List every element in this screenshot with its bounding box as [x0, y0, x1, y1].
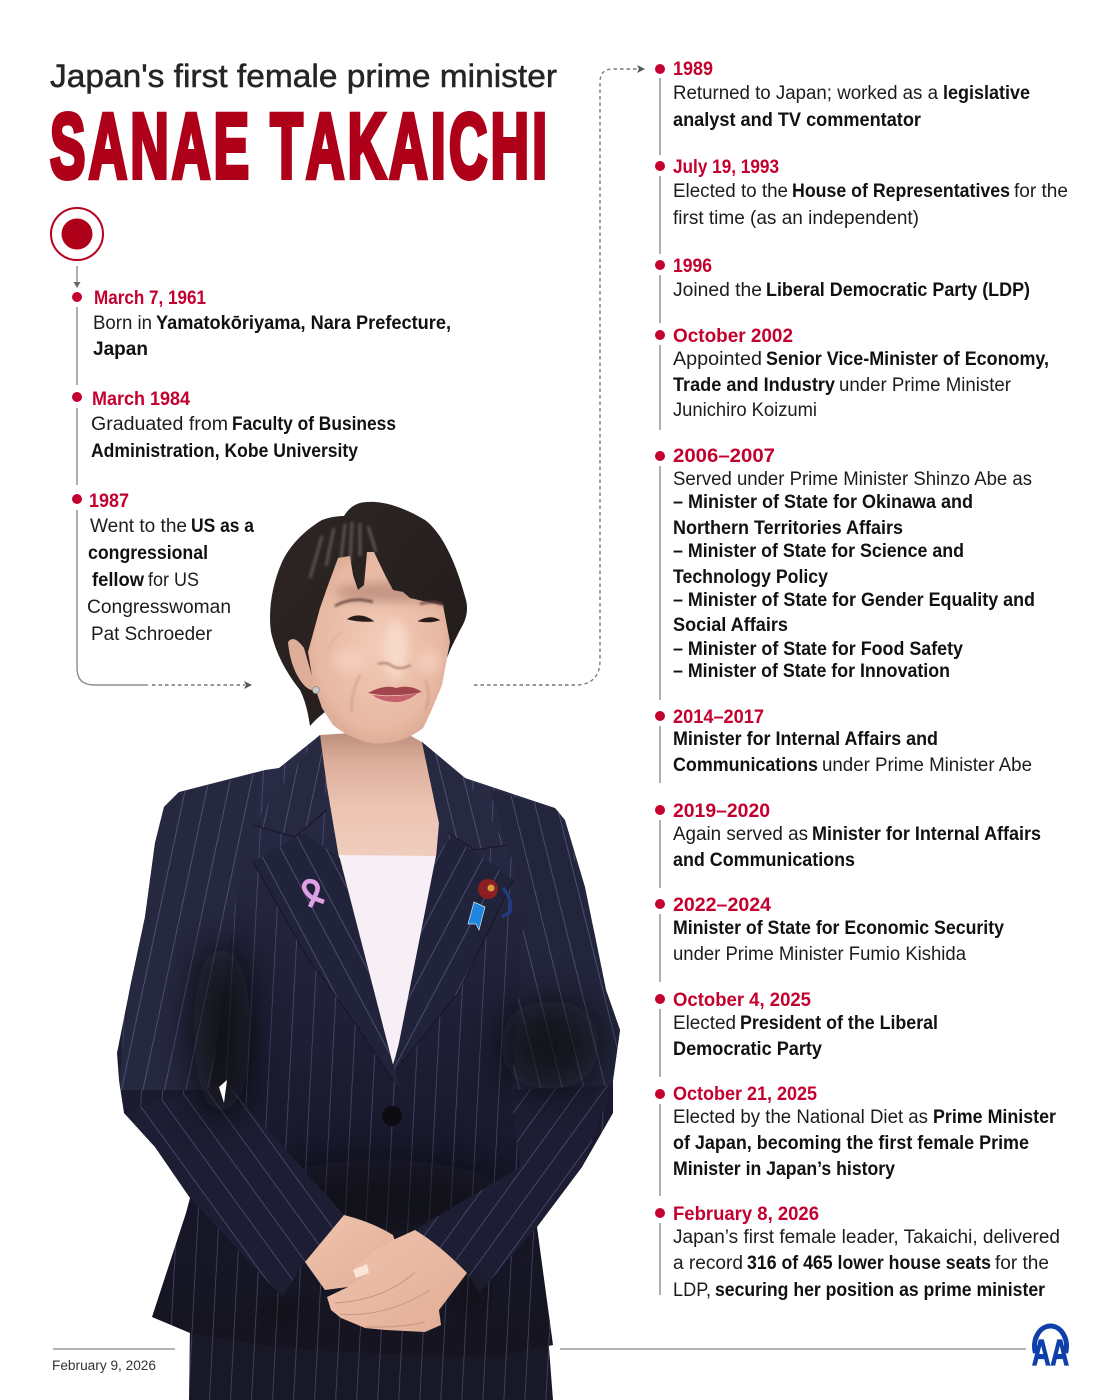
event: March 7, 1961: [72, 288, 451, 360]
event: March 1984: Administration, Kobe University: [91, 441, 358, 462]
event: 2006–2007: [655, 446, 1035, 700]
arrow: sun to first event: [74, 266, 80, 288]
event: 1987: for US: [148, 570, 199, 591]
event: 2019–2020: Minister for Internal Affairs: [812, 824, 1041, 845]
event: 2006–2007: – Minister of State for Okinawa and: [673, 492, 973, 513]
event: 1989: analyst and TV commentator: [673, 110, 922, 131]
event: July 19, 1993: July 19, 1993: [673, 157, 779, 178]
event: 2006–2007: Technology Policy: [673, 567, 828, 588]
right lapel: [394, 837, 513, 1070]
event: February 8, 2026: securing her position as prime minister: [715, 1280, 1046, 1301]
event: February 8, 2026: a record: [673, 1253, 743, 1274]
event: February 8, 2026: LDP,: [673, 1280, 711, 1301]
face: [308, 552, 450, 744]
event: July 19, 1993: for the: [1014, 181, 1068, 202]
event: 2006–2007: – Minister of State for Innovation: [673, 661, 950, 682]
right collar: [422, 742, 506, 850]
blue ribbon pin: [468, 902, 485, 930]
event: 2019–2020: and Communications: [673, 850, 855, 871]
event: 1987: 1987: [89, 491, 129, 512]
portrait photo of Sanae Takaichi: [100, 502, 630, 1400]
event: October 2002: Trade and Industry: [673, 375, 835, 396]
timeline connector: left column: [77, 307, 252, 689]
event: October 21, 2025: [655, 1084, 1057, 1196]
event: March 1984: Faculty of Business: [232, 414, 396, 435]
event: 2014–2017: 2014–2017: [673, 707, 764, 728]
event: October 4, 2025: October 4, 2025: [673, 990, 811, 1011]
footer rule right: [560, 1348, 1026, 1350]
event: 1989: legislative: [943, 83, 1030, 104]
event: July 19, 1993: [655, 157, 1068, 254]
event: March 7, 1961: Yamatokōriyama, Nara Prefecture,: [156, 313, 451, 334]
event: 1989: Returned to Japan; worked as a: [673, 83, 938, 104]
hair highlights: [310, 522, 376, 578]
footer rule left: [53, 1348, 175, 1350]
event: 2019–2020: [655, 801, 1041, 888]
event: 2014–2017: Minister for Internal Affairs and: [673, 729, 938, 750]
event: March 1984: [72, 389, 396, 462]
event: March 7, 1961: Born in: [93, 313, 152, 334]
jacket button: [382, 1106, 402, 1126]
event: October 2002: Appointed: [673, 349, 762, 370]
event: October 4, 2025: Democratic Party: [673, 1039, 822, 1060]
title: SANAE TAKAICHI: [50, 94, 550, 197]
event: 2006–2007: Northern Territories Affairs: [673, 518, 903, 539]
event: 1987: congressional: [88, 543, 208, 564]
event: October 2002: [655, 326, 1049, 430]
nose: [378, 663, 411, 668]
left collar: [253, 735, 327, 837]
event: 1996: Liberal Democratic Party (LDP): [766, 280, 1030, 301]
logo: Anadolu Agency: [1032, 1326, 1069, 1373]
left lapel: [253, 833, 401, 1090]
event: October 2002: under Prime Minister: [839, 375, 1012, 396]
earring: [312, 686, 320, 694]
event: 2006–2007: 2006–2007: [673, 446, 775, 467]
logo: Anadolu Agency: AA: [1032, 1332, 1069, 1373]
event: February 8, 2026: 316 of 465 lower house seats: [747, 1253, 991, 1274]
event: 2022–2024: [655, 895, 1004, 982]
event: 2022–2024: Minister of State for Economic Security: [673, 918, 1004, 939]
red lapel pin: [478, 879, 511, 917]
event: February 8, 2026: for the: [995, 1253, 1049, 1274]
event: 1987: Went to the: [90, 516, 187, 537]
event: October 21, 2025: October 21, 2025: [673, 1084, 817, 1105]
event: October 4, 2025: [655, 990, 938, 1077]
event: March 1984: March 1984: [92, 389, 190, 410]
event: 2019–2020: Again served as: [673, 824, 808, 845]
pink ribbon pin: [304, 881, 324, 907]
event: 2006–2007: Social Affairs: [673, 615, 788, 636]
event: 2006–2007: – Minister of State for Science and: [673, 541, 964, 562]
head: [270, 502, 467, 744]
event: 1987: US as a: [191, 516, 254, 537]
event: March 7, 1961: March 7, 1961: [94, 288, 206, 309]
footer date: February 9, 2026: [52, 1358, 156, 1373]
event: 1996: [655, 256, 1030, 323]
event: 2006–2007: Served under Prime Minister Shinzo Abe as: [673, 469, 1032, 490]
event: October 21, 2025: Elected by the National Diet as: [673, 1107, 928, 1128]
event: October 2002: October 2002: [673, 326, 793, 347]
event: 1996: 1996: [673, 256, 712, 277]
hands: [305, 1215, 467, 1332]
event: February 8, 2026: February 8, 2026: [673, 1204, 819, 1225]
event: 1987: fellow: [92, 570, 144, 591]
event: July 19, 1993: first time (as an independent): [673, 208, 919, 229]
event: 2014–2017: Communications: [673, 755, 818, 776]
event: October 4, 2025: President of the Liberal: [740, 1013, 938, 1034]
neck: [320, 730, 439, 858]
event: October 21, 2025: Minister in Japan’s history: [673, 1159, 895, 1180]
skirt: [189, 1325, 553, 1400]
event: 2022–2024: under Prime Minister Fumio Kishida: [673, 944, 966, 965]
event: 2014–2017: under Prime Minister Abe: [822, 755, 1032, 776]
white top: [339, 855, 436, 1065]
subtitle: Japan's first female prime minister: [50, 58, 557, 94]
event: 2019–2020: 2019–2020: [673, 801, 770, 822]
eyes: [348, 616, 439, 622]
event: October 2002: Junichiro Koizumi: [673, 400, 817, 421]
event: October 2002: Senior Vice-Minister of Economy,: [766, 349, 1049, 370]
event: October 21, 2025: of Japan, becoming the first female Prime: [673, 1133, 1029, 1154]
event: 1996: Joined the: [673, 280, 762, 301]
event: 2022–2024: 2022–2024: [673, 895, 771, 916]
timeline connector: dashed link to right column: [474, 65, 645, 685]
event: 1987: [72, 491, 254, 645]
event: October 21, 2025: Prime Minister: [933, 1107, 1057, 1128]
event: 1987: Pat Schroeder: [91, 624, 213, 645]
event: 2006–2007: – Minister of State for Food Safety: [673, 639, 963, 660]
event: July 19, 1993: Elected to the: [673, 181, 788, 202]
event: March 1984: Graduated from: [91, 414, 228, 435]
hair: [270, 502, 467, 726]
event: 1989: [655, 59, 1030, 155]
icon: rising sun circle: [51, 208, 103, 260]
event: October 4, 2025: Elected: [673, 1013, 736, 1034]
event: 2014–2017: [655, 707, 1032, 783]
event: 1987: Congresswoman: [87, 597, 231, 618]
eyebrows: [335, 600, 443, 606]
event: March 7, 1961: Japan: [93, 339, 148, 360]
event: 2006–2007: – Minister of State for Gender Equality and: [673, 590, 1035, 611]
event: July 19, 1993: House of Representatives: [792, 181, 1010, 202]
jacket: [100, 730, 630, 1370]
ear: [288, 639, 316, 690]
event: February 8, 2026: Japan’s first female leader, Takaichi, delivered: [673, 1227, 1060, 1248]
face shading: [328, 582, 455, 712]
lips: [368, 687, 422, 695]
event: February 8, 2026: [655, 1204, 1060, 1301]
event: 1989: 1989: [673, 59, 713, 80]
